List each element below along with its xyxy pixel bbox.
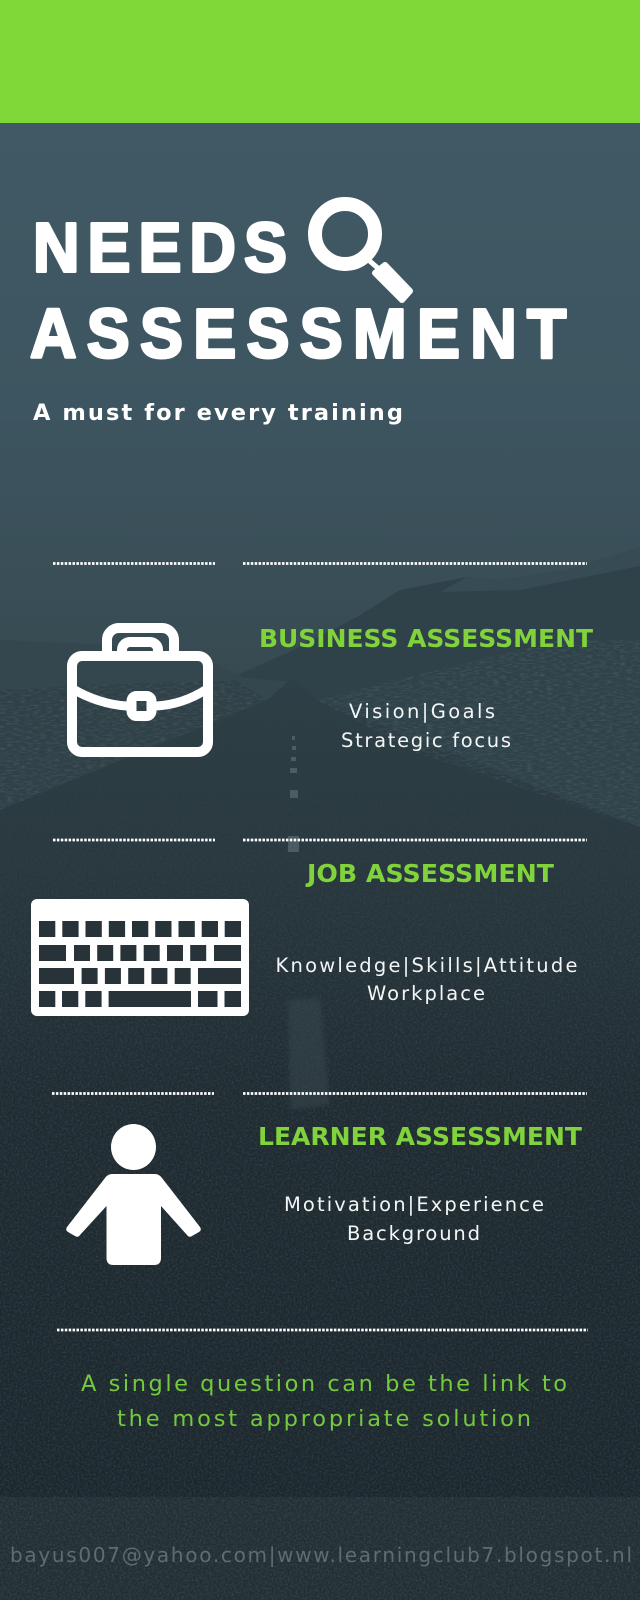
text: learner details: Motivation|Experience [284,1193,544,1216]
text: job details [276,954,578,1005]
closing statement: A single question can be the link to [81,1371,567,1397]
title [30,209,566,373]
text: business details [341,700,511,752]
icon: magnifying glass [315,204,410,300]
dotted divider 4 [57,1329,588,1331]
closing statement [81,1371,567,1432]
footer band [0,1497,640,1600]
title: NEEDS [33,209,287,287]
icon: keyboard [31,899,249,1016]
heading: business assessment: BUSINESS ASSESSMENT [259,624,593,653]
subtitle: A must for every training [33,400,403,426]
title: ASSESSMENT [30,295,566,373]
text: learner details [284,1193,544,1245]
text: business details: Strategic focus [341,729,511,752]
dotted divider 1 [53,562,587,565]
closing statement: the most appropriate solution [117,1406,531,1432]
footer contact text: bayus007@yahoo.com|www.learningclub7.blogspot.nl [10,1543,632,1567]
text: learner details: Background [347,1222,480,1245]
icon: person [66,1124,201,1265]
heading: learner assessment: LEARNER ASSESSMENT [258,1122,582,1151]
text: job details: Workplace [367,982,485,1005]
dotted divider 2 [53,839,587,841]
text: business details: Vision|Goals [349,700,495,723]
top green banner [0,0,640,123]
dotted divider 3 [52,1092,587,1095]
heading: job assessment: JOB ASSESSMENT [305,859,554,888]
text: job details: Knowledge|Skills|Attitude [276,954,578,977]
icon: briefcase [72,628,208,752]
